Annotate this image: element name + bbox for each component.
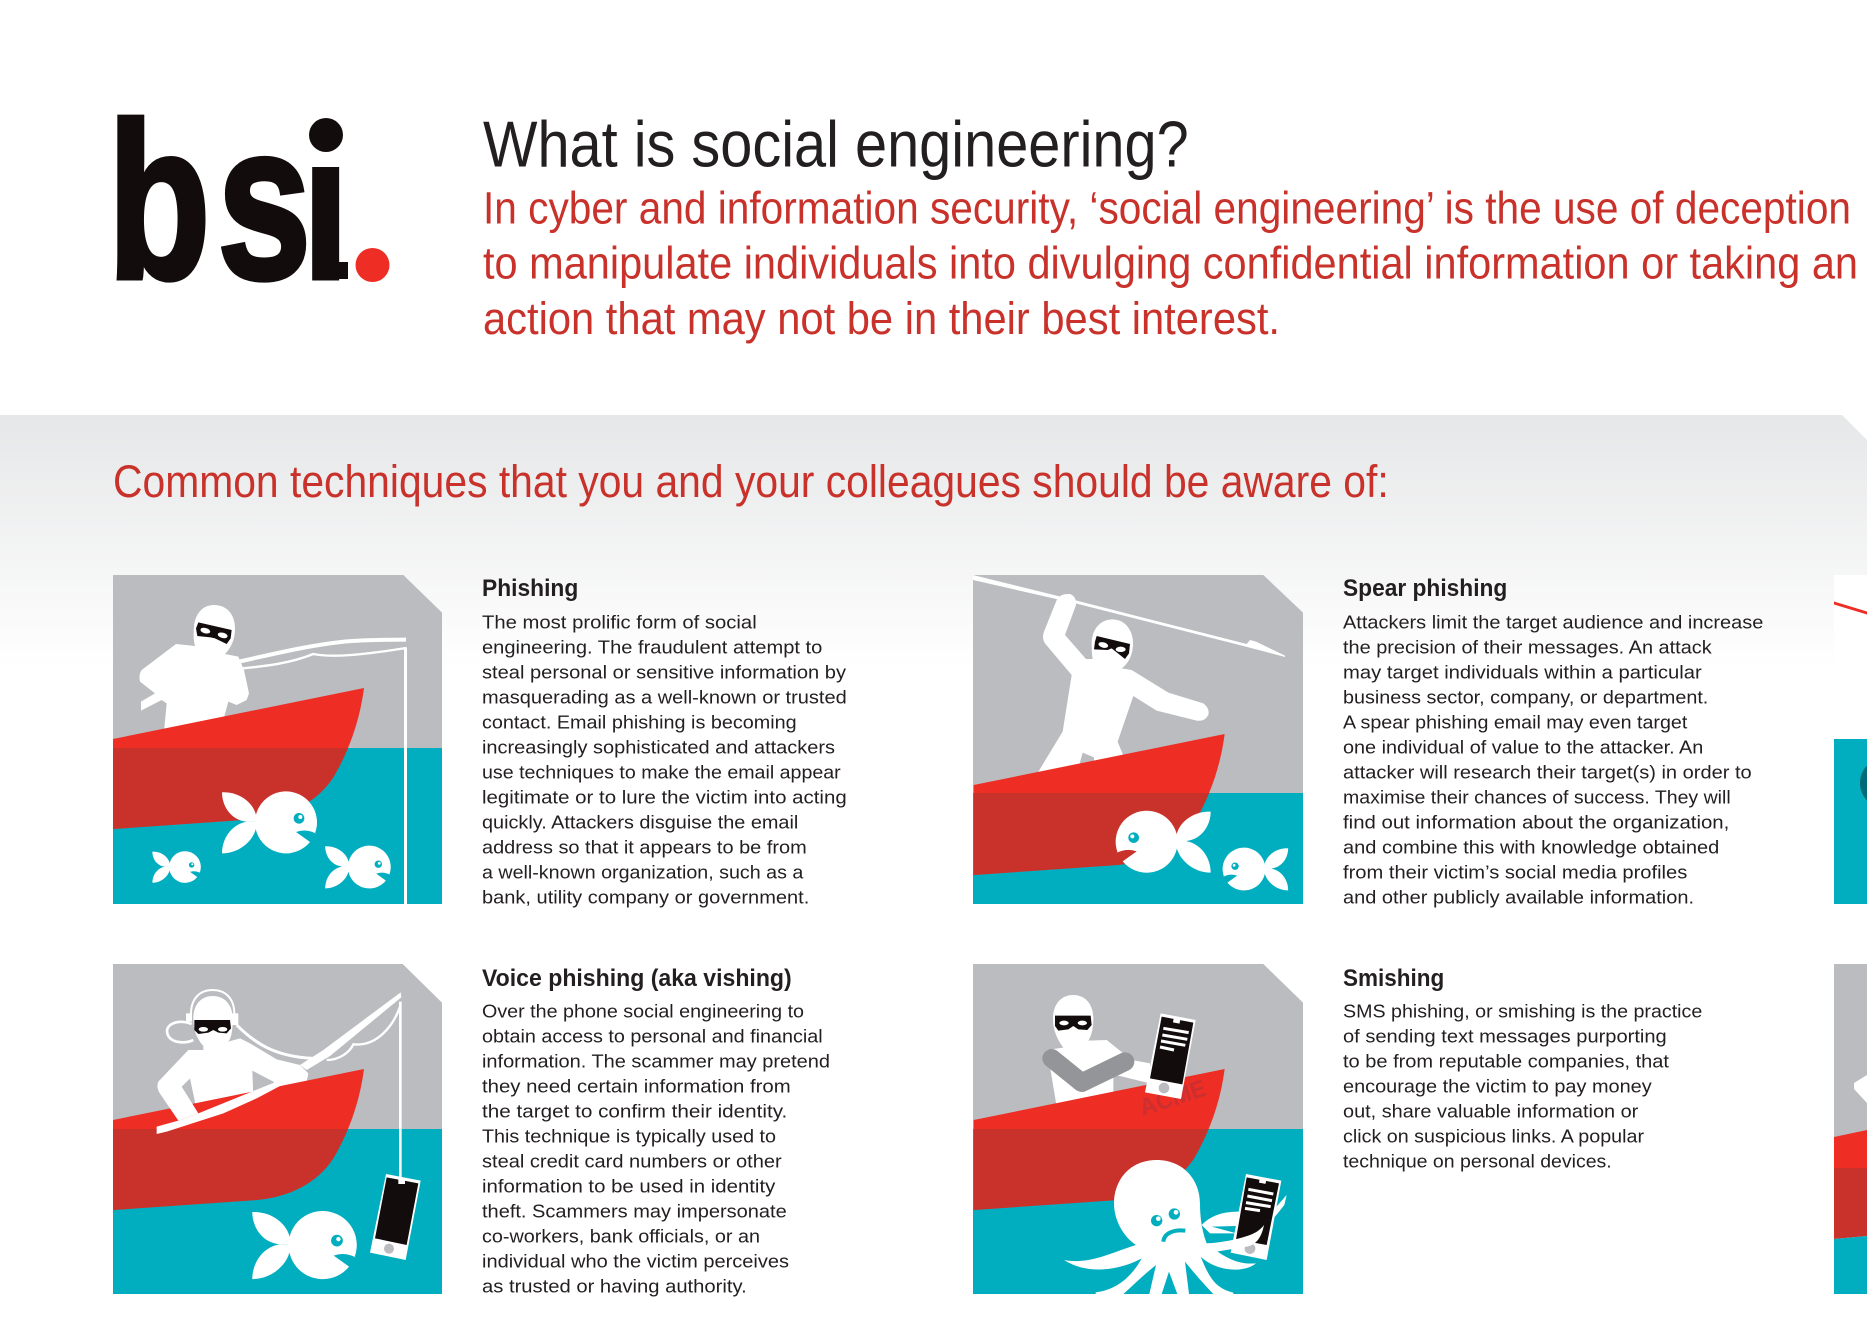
section heading: Common techniques that you and your colleagues should be aware of:: [113, 456, 1389, 507]
text: smishing: click on suspicious links. A popular: [1343, 1126, 1644, 1146]
text: spear phishing: and other publicly available information.: [1343, 886, 1694, 907]
text: phishing: a well-known organization, such as a: [482, 861, 804, 882]
title: What is social engineering?: [483, 108, 1189, 181]
intro paragraph: [483, 182, 1858, 344]
text: smishing: to be from reputable companies, that: [1343, 1050, 1670, 1072]
text: spear phishing: and combine this with knowledge obtained: [1343, 836, 1719, 857]
text: voice phishing: theft. Scammers may impersonate: [482, 1200, 787, 1222]
text: phishing: legitimate or to lure the victim into acting: [482, 786, 847, 807]
text: spear phishing: find out information about the organization,: [1343, 811, 1729, 832]
text: spear phishing: Spear phishing: [1343, 575, 1507, 602]
text: spear phishing: A spear phishing email may even target: [1343, 711, 1688, 732]
text: spear phishing: may target individuals within a particular: [1343, 661, 1702, 682]
text: spear phishing: [1343, 575, 1763, 907]
text: phishing: engineering. The fraudulent attempt to: [482, 636, 822, 657]
text: voice phishing: steal credit card numbers or other: [482, 1150, 782, 1172]
illustration: voice phishing: [113, 964, 442, 1294]
text: phishing: address so that it appears to be from: [482, 836, 807, 857]
text: voice phishing: This technique is typically used to: [482, 1126, 776, 1146]
text: phishing: Phishing: [482, 575, 578, 602]
text: voice phishing: information. The scammer may pretend: [482, 1050, 830, 1072]
text: spear phishing: attacker will research their target(s) in order to: [1343, 761, 1752, 782]
text: spear phishing: from their victim’s social media profiles: [1343, 861, 1687, 882]
text: voice phishing: individual who the victim perceives: [482, 1250, 789, 1272]
text: phishing: bank, utility company or government.: [482, 886, 809, 907]
text: phishing: masquerading as a well-known or trusted: [482, 686, 847, 707]
illustration: phishing: [113, 575, 442, 904]
text: voice phishing: Voice phishing (aka vishing): [482, 965, 792, 992]
text: voice phishing: the target to confirm their identity.: [482, 1100, 787, 1122]
text: spear phishing: Attackers limit the target audience and increase: [1343, 611, 1763, 632]
text: smishing: of sending text messages purporting: [1343, 1026, 1667, 1046]
text: phishing: quickly. Attackers disguise the email: [482, 811, 798, 832]
text: spear phishing: the precision of their messages. An attack: [1343, 636, 1712, 657]
text: phishing: [482, 575, 847, 907]
text: voice phishing: co-workers, bank officials, or an: [482, 1226, 760, 1246]
text: smishing: out, share valuable information or: [1343, 1100, 1638, 1122]
text: voice phishing: they need certain information from: [482, 1076, 791, 1096]
text: voice phishing: Over the phone social engineering to: [482, 1000, 804, 1022]
text: smishing: encourage the victim to pay money: [1343, 1076, 1652, 1096]
text: voice phishing: obtain access to personal and financial: [482, 1026, 823, 1046]
text: voice phishing: [482, 965, 830, 1296]
text: smishing: technique on personal devices.: [1343, 1150, 1612, 1172]
text: smishing: [1343, 965, 1702, 1172]
cropped illustration: bottom right: [1834, 964, 1867, 1294]
logo: bsi: bsi: [107, 78, 349, 325]
text: spear phishing: maximise their chances of success. They will: [1343, 786, 1731, 807]
text: smishing: SMS phishing, or smishing is the practice: [1343, 1000, 1702, 1022]
logo: bsi: .: [350, 132, 394, 311]
illustration: smishing: ACME: [1136, 1075, 1210, 1122]
text: phishing: steal personal or sensitive information by: [482, 661, 847, 682]
grey gradient band: [0, 415, 1867, 668]
illustration: spear phishing: [973, 575, 1303, 904]
text: smishing: Smishing: [1343, 965, 1444, 992]
illustration: smishing: [973, 964, 1303, 1294]
text: spear phishing: one individual of value to the attacker. An: [1343, 736, 1703, 757]
text: phishing: increasingly sophisticated and attackers: [482, 736, 835, 757]
intro paragraph: action that may not be in their best interest.: [483, 293, 1280, 344]
text: spear phishing: business sector, company, or department.: [1343, 686, 1708, 707]
text: voice phishing: information to be used in identity: [482, 1176, 776, 1196]
text: phishing: The most prolific form of social: [482, 611, 757, 632]
text: phishing: contact. Email phishing is becoming: [482, 711, 797, 732]
text: voice phishing: as trusted or having authority.: [482, 1276, 747, 1296]
text: phishing: use techniques to make the email appear: [482, 761, 841, 782]
cropped illustration: top right: [1834, 575, 1867, 904]
